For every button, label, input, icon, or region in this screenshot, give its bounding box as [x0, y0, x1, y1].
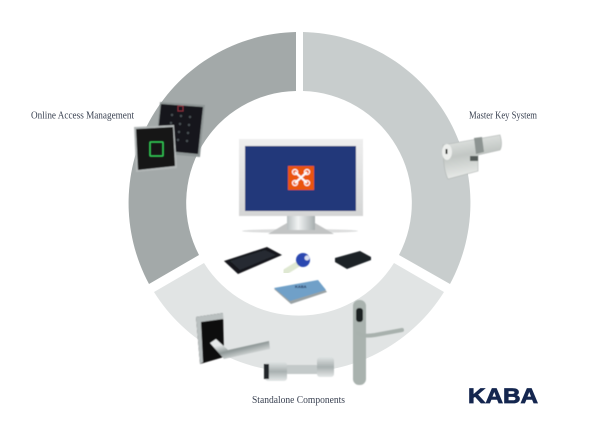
icon: blue key	[285, 253, 310, 272]
icon: door fitting with handle	[353, 300, 402, 385]
icon: smartphone	[224, 247, 282, 274]
icon: lock cylinder	[442, 135, 502, 179]
icon: access card	[274, 280, 327, 304]
label: online access management: Online Access Management	[31, 110, 134, 122]
segment: online access management	[129, 32, 296, 284]
logo: KABA: KABA	[468, 385, 538, 408]
icon: black fob	[335, 251, 371, 269]
icon: lever door handle	[196, 313, 270, 364]
icon: monitor	[239, 139, 363, 234]
icon: access card: KABA	[295, 284, 307, 289]
segment: master key system	[303, 32, 470, 284]
label: standalone components: Standalone Components	[252, 395, 345, 406]
segment: standalone components	[154, 263, 444, 372]
icon: electronic cylinder	[264, 357, 334, 381]
icon: access card readers	[134, 102, 205, 172]
label: master key system: Master Key System	[469, 110, 537, 122]
